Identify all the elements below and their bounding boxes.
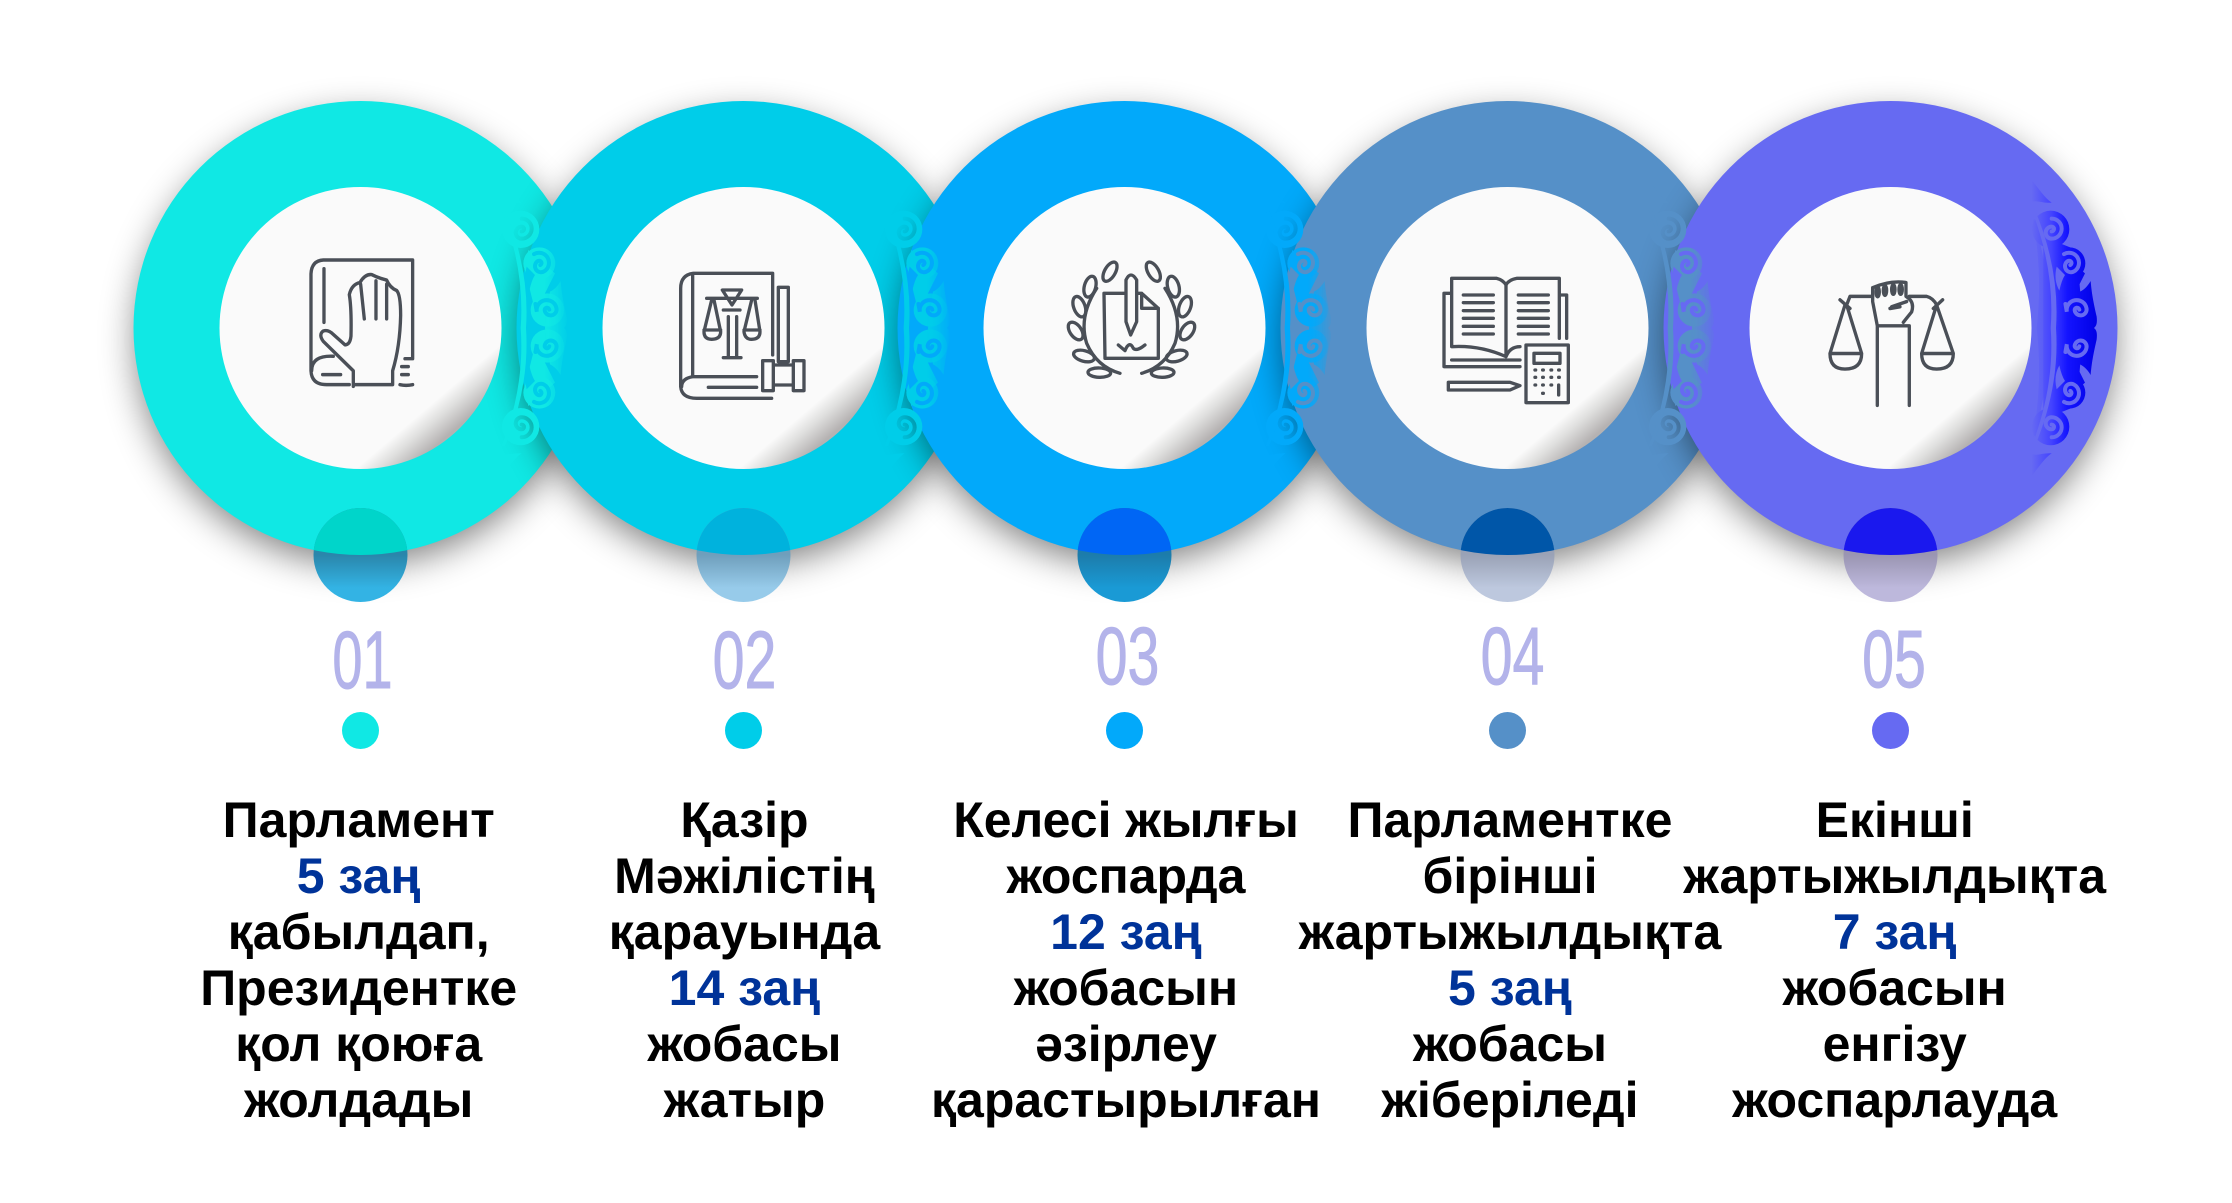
dot 1 [342, 712, 379, 749]
number 03: 03 [1096, 610, 1159, 701]
text block 3: қарастырылған [931, 1072, 1321, 1128]
text block 5: жартыжылдықта [1682, 848, 2107, 904]
inner circle 4 [1366, 187, 1648, 469]
icon: open book with calculator [1444, 278, 1568, 403]
ring 1 [134, 101, 588, 564]
text block 1: жолдады [243, 1072, 473, 1128]
text block 5: 7 заң [1833, 904, 1957, 960]
text block 3: жоспарда [1006, 848, 1247, 904]
text block 3: әзірлеу [1035, 1016, 1217, 1072]
small circle 4 [1460, 508, 1554, 602]
ornament on ring 5 [2036, 186, 2097, 470]
small circle 3 [1078, 508, 1172, 602]
dot 4 [1489, 712, 1526, 749]
text block 2: қарауында [609, 904, 881, 960]
text block 3: жобасын [1013, 960, 1238, 1016]
ring 3 [898, 101, 1352, 564]
text block 4: жартыжылдықта [1298, 904, 1722, 960]
text block 1: Президентке [200, 960, 517, 1016]
dot 2 [725, 712, 762, 749]
icon: fist holding scales [1830, 282, 1953, 405]
text block 4: Парламентке [1348, 792, 1672, 848]
ornament on ring 4 [1654, 214, 1712, 445]
text block 1: 5 заң [297, 848, 421, 904]
inner circle 3 [984, 187, 1266, 469]
text block 2: жатыр [663, 1072, 825, 1128]
text block 5: Екінші [1816, 792, 1974, 848]
ring 4 [1280, 101, 1734, 564]
number 01: 01 [332, 614, 393, 706]
text block 4 [1298, 792, 1722, 1128]
text block 3: Келесі жылғы [953, 792, 1299, 848]
text block 2: Мәжілістің [614, 848, 875, 904]
small circle 5 [1844, 508, 1938, 602]
text block 5 [1682, 792, 2107, 1128]
text block 2: жобасы [647, 1016, 841, 1072]
text block 5: жобасын [1782, 960, 2007, 1016]
text block 1: қол қоюға [235, 1016, 483, 1072]
icon: hand on book [311, 260, 413, 386]
ring 5 [1664, 101, 2118, 564]
inner circle 5 [1750, 187, 2032, 469]
text block 3 [931, 792, 1321, 1128]
ornament on ring 1 [506, 213, 564, 445]
text block 1 [200, 792, 517, 1128]
icon: laurel wreath with signed document [1065, 260, 1198, 378]
text block 3: 12 заң [1050, 904, 1202, 960]
text block 2: Қазір [680, 792, 809, 848]
text block 4: 5 заң [1448, 960, 1572, 1016]
dot 5 [1872, 712, 1909, 749]
dot 3 [1106, 712, 1143, 749]
text block 2: 14 заң [669, 960, 820, 1016]
text block 5: жоспарлауда [1731, 1072, 2058, 1128]
number 05: 05 [1862, 613, 1926, 704]
text block 4: жобасы [1412, 1016, 1607, 1072]
small circle 2 [696, 508, 790, 602]
ring 2 [516, 101, 970, 564]
inner circle 2 [602, 187, 884, 469]
text block 4: жіберіледі [1380, 1072, 1639, 1128]
small circle 1 [314, 508, 408, 602]
text block 1: қабылдап, [228, 904, 490, 960]
icon: law book with gavel [681, 273, 804, 398]
text block 1: Парламент [223, 792, 495, 848]
ornament on ring 2 [888, 212, 947, 454]
text block 5: енгізу [1823, 1016, 1967, 1072]
inner circle 1 [220, 187, 502, 469]
number 02: 02 [713, 614, 776, 705]
text block 4: бірінші [1423, 848, 1597, 904]
text block 2 [609, 792, 881, 1128]
ornament on ring 3 [1270, 213, 1330, 445]
number 04: 04 [1481, 610, 1544, 701]
